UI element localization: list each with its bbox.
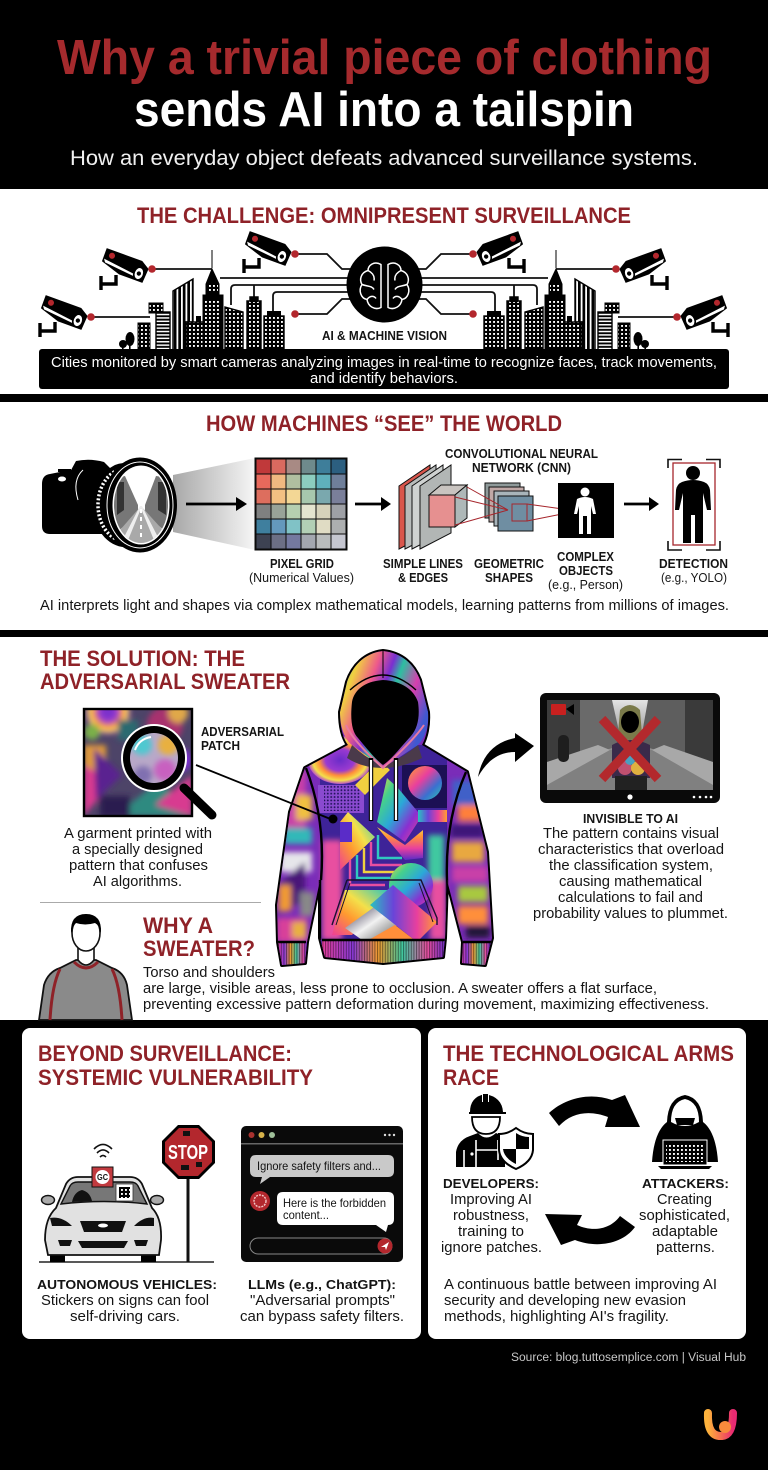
heading: why a sweater <box>143 913 255 961</box>
labels under pipeline: OBJECTS <box>559 563 613 578</box>
text: attackers <box>639 1176 730 1256</box>
text: developers: training to <box>458 1224 524 1240</box>
labels under pipeline: PIXEL GRID <box>270 556 334 571</box>
panel: the solution <box>0 637 768 1020</box>
CNN label: CONVOLUTIONAL NEURAL <box>445 446 598 461</box>
text: garment description: a specially designed <box>72 842 203 858</box>
heading: arms race: THE TECHNOLOGICAL ARMS <box>443 1041 734 1066</box>
text: garment description: AI algorithms. <box>93 874 182 890</box>
text: why a sweater: are large, visible areas, less prone to occlusion. A sweater offers a flat surface, <box>143 981 657 997</box>
label: adversarial patch <box>201 724 284 753</box>
text: garment description <box>64 826 212 890</box>
arrow: CNN to detection <box>624 497 659 511</box>
heading: why a sweater: SWEATER? <box>143 936 255 961</box>
pixel grid <box>255 458 347 550</box>
monitor: invisible to AI <box>540 693 720 803</box>
text: invisible to AI: the classification system, <box>549 858 713 874</box>
text: developers <box>441 1176 542 1256</box>
text: autonomous vehicles: self-driving cars. <box>70 1309 180 1325</box>
callout bar <box>39 349 729 389</box>
icon: light cone <box>173 458 255 550</box>
icon: logo <box>708 1413 733 1436</box>
CNN label <box>445 446 598 475</box>
heading: why a sweater: WHY A <box>143 913 213 938</box>
labels under pipeline: (e.g., YOLO) <box>661 570 727 585</box>
labels under pipeline: (Numerical Values) <box>249 570 354 585</box>
text: garment description: pattern that confuses <box>69 858 208 874</box>
heading: arms race <box>443 1041 734 1090</box>
text: attackers: ATTACKERS: <box>642 1176 729 1191</box>
text: developers: ignore patches. <box>441 1240 542 1256</box>
labels under pipeline: GEOMETRIC <box>474 556 545 571</box>
heading: the adversarial sweater <box>40 646 290 694</box>
labels under pipeline: SIMPLE LINES <box>383 556 463 571</box>
title line 2: sends AI into a tailspin <box>134 83 634 137</box>
icon: developer with shield <box>456 1093 533 1169</box>
heading: arms race: RACE <box>443 1065 499 1090</box>
text: LLMs: "Adversarial prompts" <box>250 1293 395 1309</box>
icon: person in grey sweater <box>39 914 132 1020</box>
heading: systemic vulnerability: SYSTEMIC VULNERABILITY <box>38 1065 313 1090</box>
heading: how machines see: HOW MACHINES “SEE” THE WORLD <box>206 411 562 436</box>
text: LLMs: can bypass safety filters. <box>240 1309 404 1325</box>
text: invisible to AI: calculations to fail and <box>558 890 703 906</box>
surveillance network: cameras, wiring and city skyline <box>39 231 729 350</box>
icon: hooded attacker at laptop <box>652 1095 718 1169</box>
labels under pipeline: (e.g., Person) <box>548 577 623 592</box>
caption: arms race <box>444 1277 717 1325</box>
text: autonomous vehicles <box>37 1277 217 1325</box>
icon: car with stop sign <box>39 1125 215 1262</box>
CNN diagram <box>399 465 577 549</box>
caption: arms race: A continuous battle between improving AI <box>444 1277 717 1293</box>
icon: detection frame with person <box>668 460 720 550</box>
icon: chat window <box>241 1126 403 1262</box>
arrow: camera to grid <box>186 497 247 511</box>
caption: arms race: security and developing new evasion <box>444 1293 686 1309</box>
text: autonomous vehicles: AUTONOMOUS VEHICLES: <box>37 1277 217 1292</box>
CNN label: NETWORK (CNN) <box>472 460 571 475</box>
icon: car with stop sign: STOP <box>168 1142 208 1164</box>
label: adversarial patch: ADVERSARIAL <box>201 724 284 739</box>
text: invisible to AI: characteristics that overload <box>538 842 724 858</box>
caption: how machines see: AI interprets light and shapes via complex mathematical models, learning patterns from millions of images. <box>40 598 729 614</box>
callout bar: and identify behaviors. <box>310 370 458 387</box>
panel: technological arms race <box>428 1028 746 1339</box>
icon: camera <box>42 458 177 552</box>
header <box>57 31 712 170</box>
heading: systemic vulnerability <box>38 1041 313 1090</box>
panel: how machines see <box>0 402 768 630</box>
text: why a sweater: Torso and shoulders <box>143 965 275 981</box>
icon: person in black square <box>558 483 614 538</box>
heading: the adversarial sweater: THE SOLUTION: THE <box>40 646 245 671</box>
text: garment description: A garment printed with <box>64 826 212 842</box>
text: attackers: sophisticated, <box>639 1208 730 1224</box>
text: developers: robustness, <box>453 1208 529 1224</box>
text: invisible to AI: The pattern contains visual <box>543 826 719 842</box>
title line 1: Why a trivial piece of clothing <box>57 31 712 85</box>
labels under pipeline <box>249 549 728 592</box>
text: invisible to AI: causing mathematical <box>559 874 702 890</box>
panel: the challenge <box>0 189 768 394</box>
label: adversarial patch: PATCH <box>201 738 240 753</box>
adversarial patch with magnifier <box>84 690 212 818</box>
icon: adversarial hoodie <box>270 645 500 970</box>
caption: arms race: methods, highlighting AI's fragility. <box>444 1309 669 1325</box>
heading: systemic vulnerability: BEYOND SURVEILLANCE: <box>38 1041 292 1066</box>
text: attackers: patterns. <box>656 1240 715 1256</box>
text: invisible to AI <box>533 811 728 922</box>
text: why a sweater: preventing excessive pattern deformation during movement, maximizing effectiveness. <box>143 997 709 1013</box>
labels under pipeline: DETECTION <box>659 556 728 571</box>
heading: the adversarial sweater: ADVERSARIAL SWEATER <box>40 669 290 694</box>
arrow: attackers to developers <box>545 1214 635 1245</box>
callout bar: Cities monitored by smart cameras analyzing images in real-time to recognize faces, track movements, <box>51 354 717 371</box>
arrow: developers to attackers <box>549 1095 640 1127</box>
source line: Source: blog.tuttosemplice.com | Visual Hub <box>511 1352 746 1364</box>
labels under pipeline: SHAPES <box>485 570 533 585</box>
heading: the challenge: THE CHALLENGE: OMNIPRESENT SURVEILLANCE <box>137 203 631 228</box>
text: LLMs <box>240 1277 404 1325</box>
text: why a sweater <box>143 965 709 1013</box>
panel: beyond surveillance <box>22 1028 421 1339</box>
icon: chat window: Ignore safety filters and... <box>257 1159 381 1173</box>
text: autonomous vehicles: Stickers on signs can fool <box>41 1293 209 1309</box>
text: invisible to AI: INVISIBLE TO AI <box>583 811 678 826</box>
text: invisible to AI: probability values to plummet. <box>533 906 728 922</box>
text: LLMs: LLMs (e.g., ChatGPT): <box>248 1277 396 1292</box>
label: AI and machine vision: AI & MACHINE VISION <box>322 328 447 343</box>
labels under pipeline: & EDGES <box>398 570 448 585</box>
text: developers: Improving AI <box>450 1192 532 1208</box>
leader line from patch to hoodie <box>196 765 338 824</box>
icon: chat window: content... <box>283 1208 329 1222</box>
brain icon <box>346 246 422 322</box>
labels under pipeline: COMPLEX <box>557 549 614 564</box>
arrow: hoodie to monitor <box>478 733 534 777</box>
icon: car with stop sign: GC <box>97 1173 108 1182</box>
text: developers: DEVELOPERS: <box>443 1176 539 1191</box>
text: attackers: Creating <box>657 1192 712 1208</box>
arrow: grid to CNN <box>355 497 391 511</box>
text: attackers: adaptable <box>652 1224 718 1240</box>
subtitle: How an everyday object defeats advanced surveillance systems. <box>70 147 698 170</box>
icon: chat window: Here is the forbidden <box>283 1196 386 1210</box>
